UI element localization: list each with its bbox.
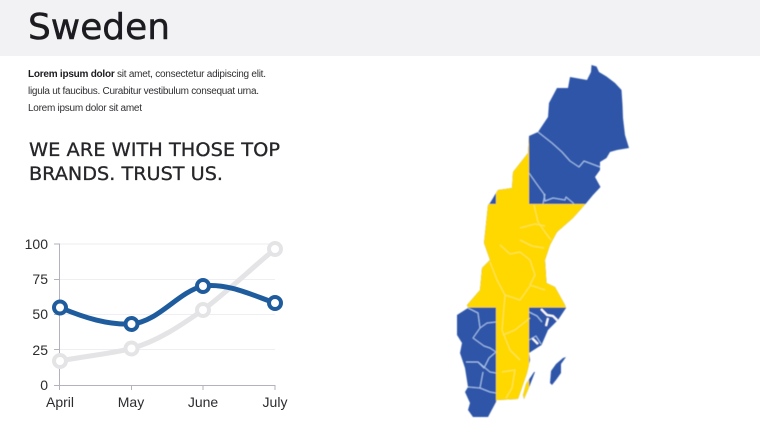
y axis labels: 25 — [32, 342, 48, 358]
line chart — [25, 236, 287, 410]
title: Sweden — [28, 7, 170, 48]
y axis labels: 100 — [25, 236, 48, 252]
heading: trust message: WE ARE WITH THOSE TOP — [29, 139, 280, 161]
x axis labels — [46, 394, 287, 410]
x axis labels: April — [46, 394, 74, 410]
y axis labels — [25, 236, 48, 393]
x axis labels: May — [118, 394, 144, 410]
y axis labels: 75 — [32, 271, 48, 287]
text block: lorem ipsum — [28, 69, 266, 114]
text block: lorem ipsum: ligula ut faucibus. Curabitur vestibulum consequat urna. — [28, 86, 259, 97]
chart axes — [54, 244, 275, 390]
text block: lorem ipsum: Lorem ipsum dolor sit amet, consectetur adipiscing elit. — [28, 69, 266, 80]
header band — [0, 0, 760, 56]
series: blue line — [54, 280, 281, 330]
x axis labels: June — [188, 394, 218, 410]
map: archipelago inlets — [532, 309, 558, 344]
y axis labels: 50 — [32, 306, 48, 322]
series: grey line — [54, 243, 281, 367]
x axis labels: July — [263, 394, 287, 410]
y axis labels: 0 — [40, 377, 48, 393]
heading: trust message — [29, 139, 280, 185]
map: regional borders on yellow — [490, 205, 551, 398]
map: regional borders on blue — [466, 132, 600, 393]
heading: trust message: BRANDS. TRUST US. — [29, 163, 223, 185]
text block: lorem ipsum: Lorem ipsum dolor sit amet — [28, 103, 142, 114]
map: Sweden with flag fill — [456, 64, 630, 418]
